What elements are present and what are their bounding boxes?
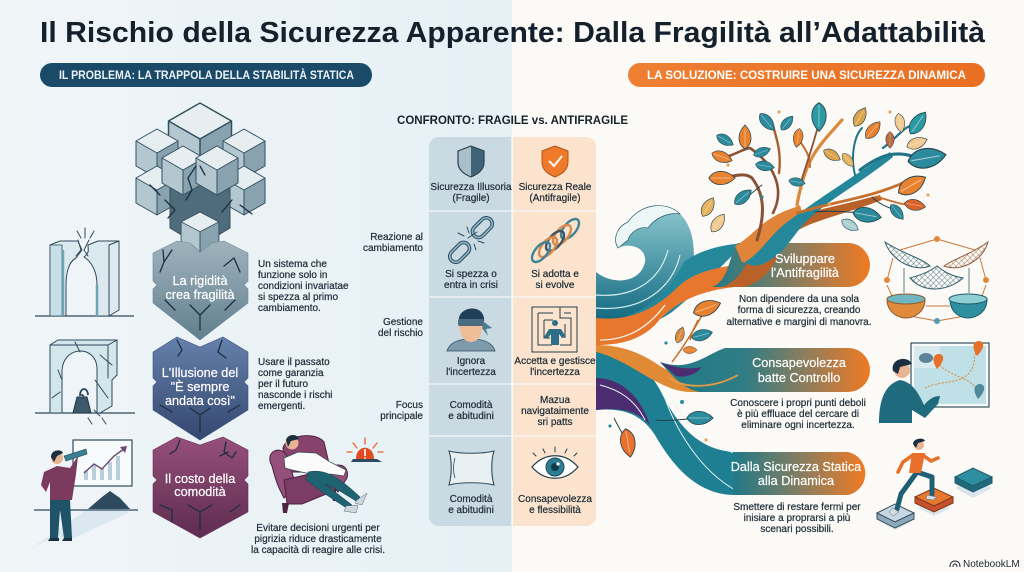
row texts: reaction: Si adotta e	[531, 269, 579, 280]
heading: awareness: batte Controllo	[758, 371, 840, 385]
icon: pillow	[449, 451, 494, 485]
icon: safety nets and bowls	[884, 236, 989, 324]
text: illusion: per il futuro	[258, 379, 308, 390]
row texts: last: e abitudini	[448, 505, 494, 516]
row texts: reaction: si evolve	[536, 280, 575, 291]
pill 3	[733, 452, 865, 495]
block: rigidity: La rigidità	[172, 274, 228, 288]
text: rigidity: cambiamento.	[258, 303, 321, 314]
row texts: risk	[446, 356, 596, 378]
pill 2	[660, 348, 870, 392]
row label: risk: del rischio	[378, 328, 423, 339]
row label: focus	[380, 400, 423, 422]
block: comfort: Il costo della	[165, 472, 236, 486]
pill 1	[712, 243, 870, 287]
dots	[608, 110, 930, 442]
row texts: reaction: Si spezza o	[445, 269, 497, 280]
small branches	[672, 312, 704, 362]
icon: cracked glass arch	[35, 228, 134, 316]
header labels: (Antifragile)	[529, 193, 581, 204]
row label: focus: principale	[380, 411, 423, 422]
row texts: risk: Ignora	[457, 356, 486, 367]
block: illusion: "È sempre	[171, 379, 229, 394]
teal stream	[596, 243, 745, 327]
icon: man with telescope and chart	[32, 440, 138, 548]
title: Il Rischio della Sicurezza Apparente: Dalla Fragilità all’Adattabilità	[40, 17, 986, 49]
row texts: last: e flessibilità	[529, 505, 581, 516]
icon: broken chain	[447, 215, 495, 265]
row label: focus: Focus	[396, 400, 423, 411]
icon: eye	[532, 447, 578, 478]
banner: solution: LA SOLUZIONE: COSTRUIRE UNA SICUREZZA DINAMICA	[647, 70, 966, 82]
text: rigidity: si spezza al primo	[258, 292, 338, 303]
logo: NotebookLM: NotebookLM	[963, 559, 1020, 570]
header labels: Sicurezza Reale	[519, 182, 592, 193]
row texts: risk: Accetta e gestisce	[514, 356, 596, 367]
banner: problem: IL PROBLEMA: LA TRAPPOLA DELLA STABILITÀ STATICA	[59, 69, 354, 82]
row texts: focus: e abitudini	[448, 411, 494, 422]
heading: comparison: CONFRONTO: FRAGILE vs. ANTIFRAGILE	[397, 113, 628, 127]
column: fragile	[429, 137, 511, 526]
row texts: last	[448, 494, 592, 516]
text: awareness: eliminare ogni incertezza.	[741, 420, 855, 431]
row texts: last: Consapevolezza	[518, 494, 592, 505]
text: illusion: Usare il passato	[258, 357, 330, 368]
icon: fragile shield	[458, 146, 484, 177]
heading: awareness: Consapevolezza	[752, 356, 847, 370]
header labels	[430, 182, 592, 204]
text: dynamic security: Smettere di restare fermi per	[733, 502, 861, 513]
block: rigidity	[153, 241, 248, 340]
text: dynamic security	[733, 502, 861, 535]
text: antifragility: forma di sicurezza, creando	[738, 305, 861, 316]
row label: reaction	[363, 232, 423, 254]
text: comfort: Evitare decisioni urgenti per	[256, 523, 380, 534]
leaves	[618, 103, 948, 458]
text: illusion: come garanzia	[258, 368, 324, 379]
block: comfort: comodità	[174, 485, 227, 499]
background left panel	[0, 0, 512, 572]
row texts: focus: Comodità	[450, 400, 493, 411]
row label: reaction: cambiamento	[363, 243, 423, 254]
row texts: reaction: entra in crisi	[444, 280, 498, 291]
icon: cracked cube cluster	[136, 103, 265, 252]
block: illusion	[153, 337, 248, 440]
illustration: wave and ribbons	[596, 152, 893, 495]
row texts: focus: Mazua	[540, 395, 570, 406]
icon: cracked arch with weight	[35, 340, 135, 424]
row dividers	[429, 211, 596, 436]
icon: person climbing steps	[877, 439, 992, 530]
icon: alarm light	[347, 438, 383, 462]
row label: risk	[378, 317, 423, 339]
comparison table	[363, 137, 596, 526]
block: illusion: andata così"	[165, 394, 235, 408]
text: rigidity: condizioni invariatae	[258, 281, 349, 292]
trunk brown	[722, 195, 882, 287]
text: rigidity: Un sistema che	[258, 259, 327, 270]
column: antifragile	[513, 137, 596, 526]
trunk teal	[745, 152, 893, 266]
ribbon to second pill	[596, 345, 745, 392]
icon: blindfolded person	[447, 308, 495, 351]
heading: antifragility: Sviluppare	[775, 252, 835, 266]
text: rigidity	[258, 259, 349, 314]
text: illusion: emergenti.	[258, 401, 305, 412]
row texts: focus: sri patts	[537, 417, 573, 428]
panel: problem column	[32, 103, 385, 556]
heading: antifragility: l'Antifragilità	[771, 266, 840, 280]
text: dynamic security: inisiare a proprarsi a più	[744, 513, 850, 524]
purple stream	[596, 378, 650, 425]
trunk orange	[735, 205, 802, 263]
heading: dynamic security	[731, 460, 862, 488]
banner: solution	[628, 63, 985, 87]
branches	[722, 120, 915, 240]
banner: problem	[40, 63, 372, 87]
illustration: tree	[608, 103, 948, 458]
header labels: (Fragile)	[452, 193, 490, 204]
block: comfort	[153, 437, 248, 538]
heading: dynamic security: Dalla Sicurezza Statica	[731, 460, 862, 474]
background right panel	[512, 0, 1024, 572]
icon: person on armchair	[270, 435, 367, 513]
text: antifragility	[726, 294, 872, 328]
text: awareness: è più effluace del cercare di	[737, 409, 859, 420]
row texts: reaction	[444, 269, 579, 291]
block: illusion: L'Illusione del	[162, 366, 238, 380]
header labels: Sicurezza Illusoria	[430, 182, 512, 193]
text: comfort	[251, 523, 385, 556]
heading: antifragility	[771, 252, 840, 280]
wave crest	[596, 206, 694, 320]
text: awareness: Conoscere i propri punti deboli	[730, 398, 866, 409]
icon: spring	[529, 216, 582, 265]
row texts: risk: l'incertezza	[530, 367, 580, 378]
text: awareness	[730, 398, 866, 431]
heading: awareness	[752, 356, 847, 385]
text: illusion: nasconde i rischi	[258, 390, 332, 401]
text: dynamic security: scenari possibili.	[760, 524, 834, 535]
icon: maze	[532, 307, 577, 352]
row texts: focus: navigataimente	[521, 406, 589, 417]
row texts: focus	[448, 395, 589, 428]
text: rigidity: funzione solo in	[258, 270, 328, 281]
row label: risk: Gestione	[383, 317, 423, 328]
text: antifragility: alternative e margini di manovra.	[726, 317, 872, 328]
text: comfort: la capacità di reagire alle crisi.	[251, 545, 385, 556]
row texts: last: Comodità	[450, 494, 493, 505]
orange stream	[596, 262, 745, 345]
heading: dynamic security: alla Dinamica	[758, 474, 835, 488]
text: comfort: pigrizia riduce drasticamente	[254, 534, 382, 545]
block: rigidity: crea fragilità	[165, 288, 235, 302]
text: antifragility: Non dipendere da una sola	[739, 294, 859, 305]
icon: person pointing at map	[879, 341, 989, 423]
teal ribbon to third pill	[596, 345, 735, 495]
row texts: risk: l'incertezza	[446, 367, 496, 378]
text: illusion	[258, 357, 332, 412]
icon: real shield	[542, 146, 568, 177]
row label: reaction: Reazione al	[370, 232, 423, 243]
